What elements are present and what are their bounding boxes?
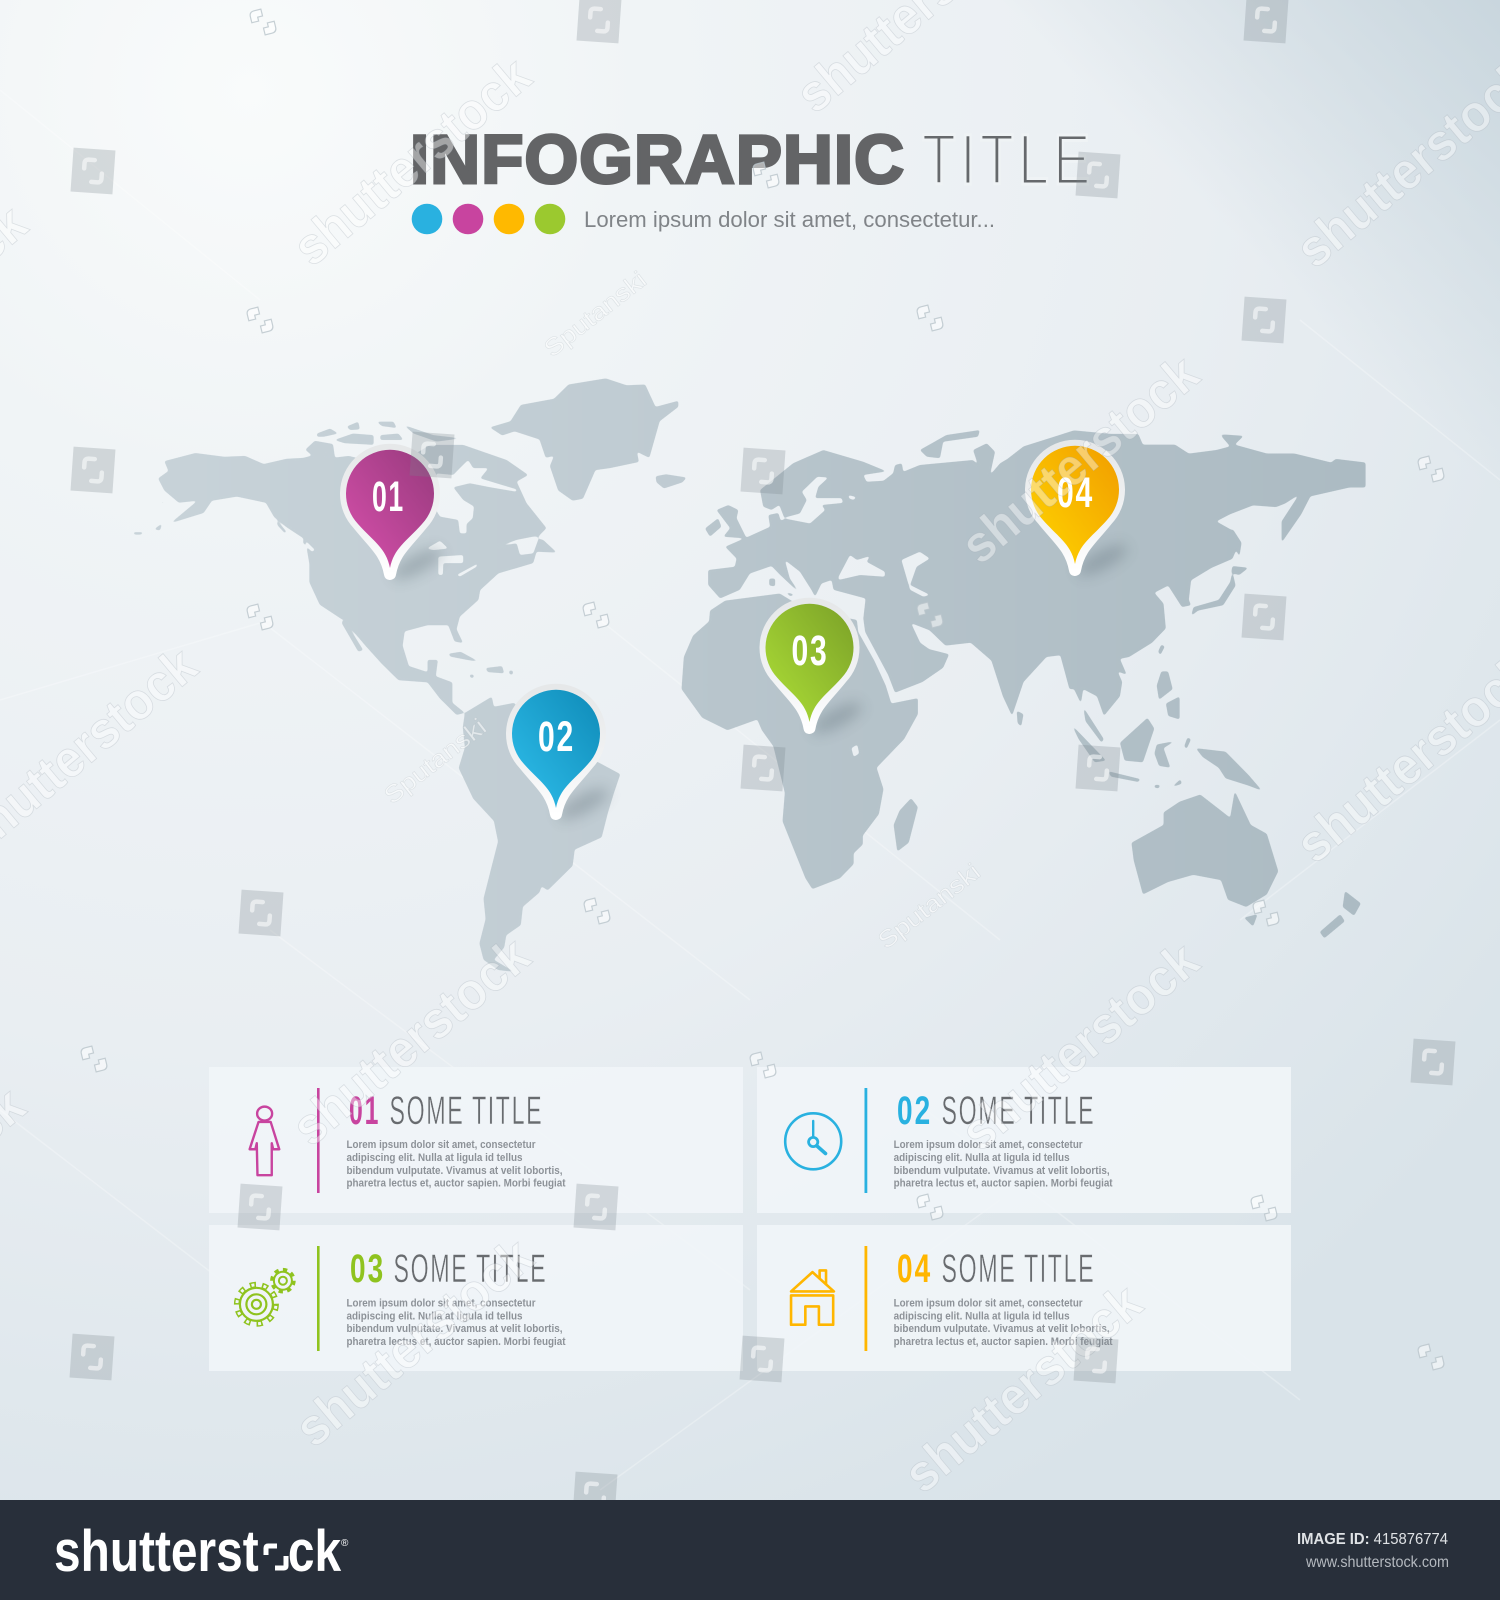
- watermark overlay: Sputanski: [379, 713, 492, 810]
- icon: house: [791, 1270, 834, 1325]
- icon: person: [250, 1107, 279, 1175]
- body text 01: pharetra lectus et, auctor sapien. Morbi feugiat: [346, 1178, 566, 1190]
- Asian islands: [1017, 529, 1248, 788]
- map: Americas and Greenland: [133, 378, 687, 972]
- subtitle: Lorem ipsum dolor sit amet, consectetur...: [584, 207, 995, 232]
- body text 03: pharetra lectus et, auctor sapien. Morbi feugiat: [346, 1336, 566, 1348]
- footer logo: shutterstock: [54, 1520, 342, 1584]
- body text 04: Lorem ipsum dolor sit amet, consectetur: [894, 1298, 1083, 1310]
- world map: [133, 378, 1366, 972]
- legend colour dots: [412, 204, 565, 234]
- footer url: www.shutterstock.com: [1305, 1554, 1449, 1571]
- New Guinea: [1196, 748, 1262, 791]
- watermark overlay: shutterstock: [284, 1227, 544, 1458]
- heading 04: SOME TITLE: [942, 1245, 1095, 1291]
- footer registered mark: ®: [341, 1538, 349, 1549]
- body text 04: adipiscing elit. Nulla at ligula id tellus: [894, 1310, 1070, 1322]
- body text 03: bibendum vulputate. Vivamus at velit lobortis,: [346, 1323, 563, 1335]
- map: Eurasia, Africa and Oceania: [681, 430, 1366, 938]
- watermark overlay: Sputanski: [539, 266, 652, 363]
- UK, Ireland, Novaya Zemlya and Mediterranean islands: [705, 430, 1242, 596]
- divider 03: [317, 1246, 320, 1351]
- panel 03: [209, 1225, 743, 1371]
- panel 04: [757, 1225, 1291, 1371]
- body text 01: [346, 1139, 566, 1190]
- South America: [459, 697, 620, 972]
- panel 01: [209, 1067, 743, 1213]
- watermark overlay: shutterstock: [950, 344, 1210, 575]
- Africa: [681, 593, 918, 889]
- body text 03: [346, 1298, 566, 1348]
- footer bar: [0, 1500, 1500, 1600]
- North America: [158, 445, 557, 715]
- panel 02: [757, 1067, 1291, 1213]
- body text 02: Lorem ipsum dolor sit amet, consectetur: [894, 1139, 1083, 1151]
- title: [410, 120, 1095, 200]
- Arctic islands: [305, 422, 462, 461]
- divider 04: [864, 1246, 867, 1351]
- body text 02: [894, 1139, 1113, 1190]
- map pin 04: [1031, 446, 1131, 581]
- watermark overlay: shutterstock: [282, 46, 542, 277]
- title thin word: TITLE: [922, 120, 1095, 200]
- body text 04: [894, 1298, 1113, 1348]
- map pin 03: [766, 604, 865, 739]
- heading 02: SOME TITLE: [942, 1087, 1095, 1133]
- watermark overlay: shutterstock: [893, 1273, 1153, 1504]
- title bold word: INFOGRAPHIC: [410, 121, 904, 198]
- watermark overlay: shutterstock: [281, 926, 541, 1157]
- heading 04: 04: [897, 1247, 932, 1291]
- map pin 04: 04: [1057, 468, 1094, 516]
- heading 01: SOME TITLE: [390, 1087, 543, 1133]
- divider 02: [864, 1088, 867, 1193]
- Australia and New Zealand: [1131, 791, 1361, 938]
- body text 01: Lorem ipsum dolor sit amet, consectetur: [346, 1139, 536, 1151]
- icon: clock: [785, 1113, 841, 1169]
- map pin 02: [512, 690, 612, 825]
- watermark overlay: shutterstock: [950, 931, 1210, 1162]
- body text 01: adipiscing elit. Nulla at ligula id tellus: [346, 1152, 523, 1164]
- Greenland and Iceland: [490, 378, 687, 501]
- map pin 01: [346, 450, 446, 585]
- Eurasia: [708, 430, 1366, 716]
- watermark overlay: Sputanski: [873, 858, 986, 955]
- footer image id: IMAGE ID: 415876774: [1297, 1531, 1448, 1548]
- body text 03: adipiscing elit. Nulla at ligula id tellus: [346, 1310, 523, 1322]
- body text 01: bibendum vulputate. Vivamus at velit lobortis,: [346, 1165, 563, 1177]
- map pin 02: 02: [538, 712, 575, 760]
- icon: gears: [237, 1270, 294, 1324]
- divider 01: [317, 1088, 320, 1193]
- body text 04: bibendum vulputate. Vivamus at velit lobortis,: [894, 1323, 1110, 1335]
- body text 04: pharetra lectus et, auctor sapien. Morbi feugiat: [894, 1336, 1113, 1348]
- heading 03: 03: [350, 1247, 385, 1291]
- heading 02: 02: [897, 1089, 932, 1133]
- body text 02: adipiscing elit. Nulla at ligula id tellus: [894, 1152, 1070, 1164]
- heading 01: 01: [349, 1089, 380, 1134]
- map pin 01: 01: [372, 473, 405, 521]
- body text 02: bibendum vulputate. Vivamus at velit lobortis,: [894, 1165, 1110, 1177]
- heading 03: SOME TITLE: [394, 1245, 547, 1291]
- body text 02: pharetra lectus et, auctor sapien. Morbi feugiat: [894, 1178, 1113, 1190]
- Madagascar: [894, 798, 918, 852]
- body text 03: Lorem ipsum dolor sit amet, consectetur: [346, 1298, 536, 1310]
- map pin 03: 03: [792, 626, 828, 674]
- Aleutian and Caribbean islands: [133, 501, 513, 678]
